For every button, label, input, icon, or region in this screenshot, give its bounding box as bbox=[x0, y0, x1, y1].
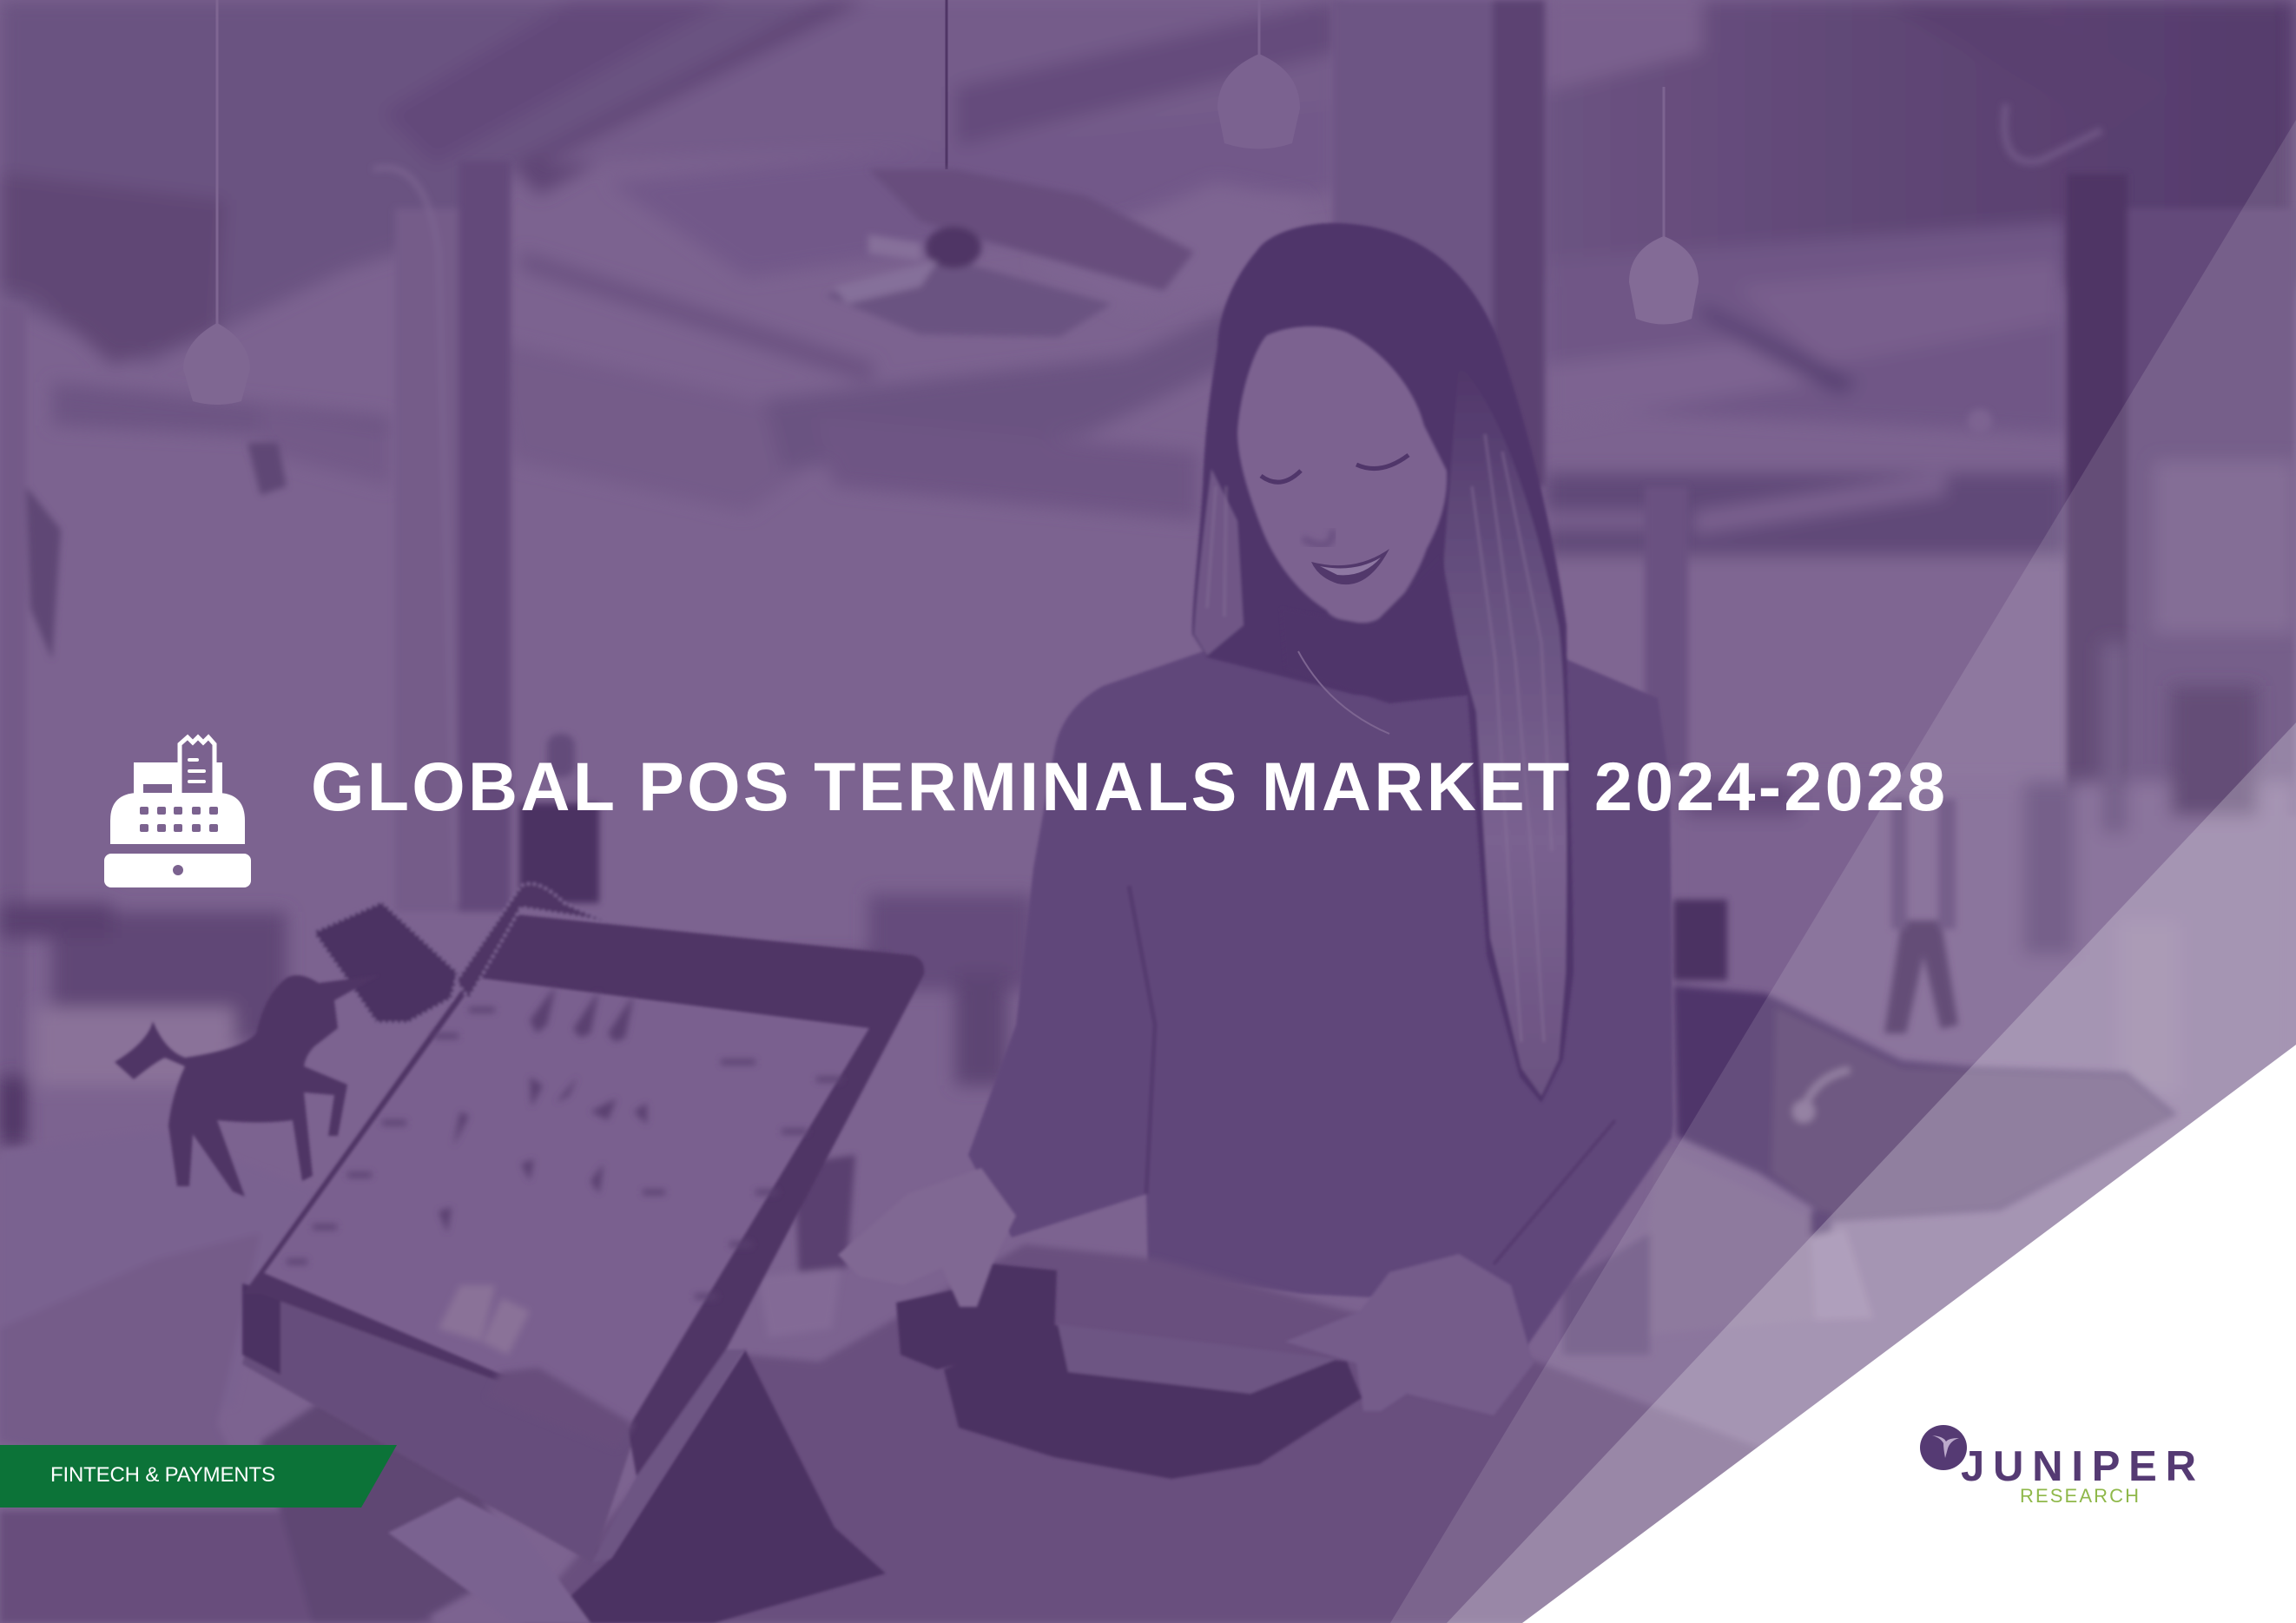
tablet screen with menu items bbox=[264, 978, 869, 1450]
ceiling, right bbox=[1033, 0, 2296, 799]
card reader and payment card bbox=[896, 1262, 1362, 1479]
ceiling and beams, left bbox=[0, 0, 1337, 521]
right side lower background bbox=[1672, 460, 2296, 1129]
pendant lamps bbox=[183, 0, 1699, 405]
spiral notebook behind tablet bbox=[313, 884, 604, 1023]
woman: face bbox=[1237, 327, 1468, 734]
cup and plant on counter bbox=[758, 1155, 855, 1337]
background person in dark clothes bbox=[519, 734, 599, 903]
woman: hair bbox=[1192, 223, 1574, 1103]
logo: Juniper Research: RESEARCH bbox=[2020, 1485, 2139, 1507]
chair and counter bbox=[1673, 986, 2177, 1222]
title: GLOBAL POS TERMINALS MARKET 2024-2028 bbox=[311, 748, 1945, 825]
logo: Juniper Research bbox=[1920, 1425, 2196, 1507]
ceiling fan bbox=[825, 169, 1194, 337]
tablet casing bbox=[242, 914, 924, 1563]
white corner triangle bbox=[1522, 1045, 2296, 1623]
logo: Juniper Research: JUNIPER bbox=[1961, 1443, 2196, 1490]
category banner bbox=[0, 1445, 397, 1508]
left hand holding card bbox=[838, 1168, 1016, 1307]
tablet stand bbox=[388, 1349, 886, 1623]
category banner: FINTECH & PAYMENTS bbox=[50, 1463, 275, 1487]
foreground table and counters bbox=[0, 1131, 1801, 1623]
right hand bbox=[1285, 1254, 1534, 1415]
left background bbox=[0, 894, 1033, 1146]
translucent triangle: inner bbox=[1447, 722, 2296, 1623]
translucent triangle: outer bbox=[1390, 120, 2296, 1623]
POS tablet terminal bbox=[242, 914, 924, 1623]
unicorn figurine bbox=[115, 975, 379, 1197]
icon: cash register bbox=[104, 737, 251, 887]
woman: sweater bbox=[968, 647, 1673, 1350]
